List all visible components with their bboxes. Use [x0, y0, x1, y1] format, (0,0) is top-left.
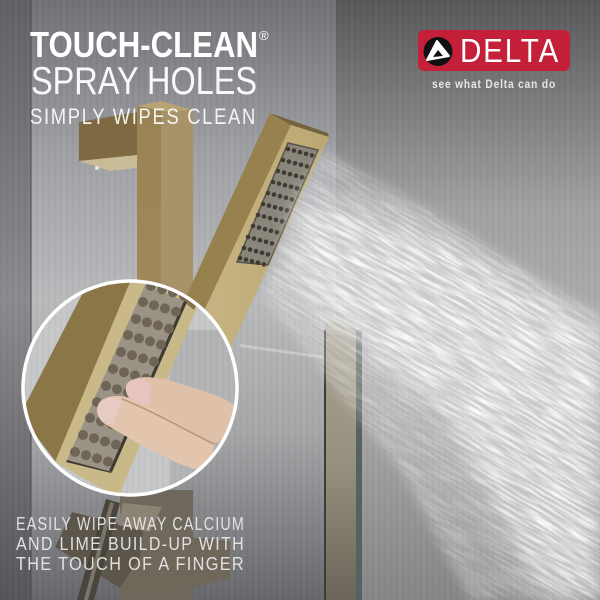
logo: Delta: [418, 30, 570, 91]
caption: AND LIME BUILD-UP WITH: [16, 534, 245, 554]
magnified dark side of handle: [26, 282, 130, 462]
caption: EASILY WIPE AWAY CALCIUM: [16, 514, 245, 534]
magnified hole panel: [66, 281, 189, 473]
magnified gold face of handle: [55, 270, 200, 498]
caption: THE TOUCH OF A FINGER: [16, 554, 245, 574]
upper finger: [126, 377, 234, 443]
hand shower: [180, 113, 329, 360]
title: ®: [259, 28, 269, 43]
spray face holes: [237, 143, 318, 267]
caption: [16, 514, 245, 574]
slide bar: [137, 101, 193, 600]
water spray: [263, 148, 600, 600]
wall bracket stub: [79, 112, 137, 171]
title: [30, 24, 269, 129]
title: SPRAY HOLES: [31, 60, 257, 103]
lower hose bracket: [55, 490, 230, 600]
logo: Delta: DELTA: [460, 32, 560, 69]
title: SIMPLY WIPES CLEAN: [30, 104, 257, 129]
lower finger: [97, 396, 214, 469]
title: TOUCH-CLEAN: [30, 24, 258, 65]
icon: delta symbol: [424, 37, 452, 66]
magnified right handle section: [182, 300, 196, 310]
logo: Delta: see what Delta can do: [432, 77, 556, 91]
magnified circle inset: [21, 279, 239, 497]
door frame: [324, 322, 362, 600]
